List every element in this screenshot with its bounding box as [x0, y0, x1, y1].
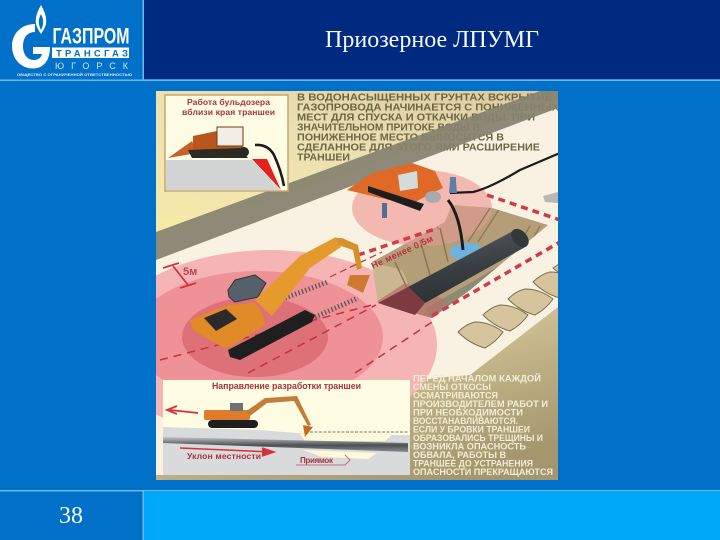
inset: bulldozer near trench edge: вблизи края траншеи: [182, 107, 275, 117]
icon: G ring: [12, 24, 50, 68]
text: top instructions: ПОНИЖЕННОЕ МЕСТО ВЫНОСИТСЯ В: [297, 132, 504, 144]
inset bulldozer: [168, 127, 249, 158]
text: safety instructions: ПРИ НЕОБХОДИМОСТИ: [413, 408, 523, 418]
icon: flame: [36, 5, 46, 34]
trench: [372, 205, 548, 318]
header bar: [0, 0, 720, 81]
text: safety instructions: ВОЗНИКЛА ОПАСНОСТЬ: [413, 442, 527, 452]
dimension: 5m: [163, 263, 197, 288]
hose: [448, 153, 560, 250]
inset: trench development direction: Уклон местности: [187, 451, 261, 461]
inset: trench development direction: Приямок: [300, 456, 334, 465]
text: top instructions: ЗНАЧИТЕЛЬНОМ ПРИТОКЕ ВОДЫ В: [297, 122, 480, 134]
text: top instructions: ГАЗОПРОВОДА НАЧИНАЕТСЯ С ПОНИЖЕННЫХ: [297, 102, 560, 114]
logo: Gazprom Transgaz Yugorsk: ОБЩЕСТВО С ОГРАНИЧЕННОЙ ОТВЕТСТВЕННОСТЬЮ: [17, 73, 132, 77]
red danger zones: [156, 170, 492, 418]
excavator body: [190, 303, 265, 347]
text: top instructions: ТРАНШЕИ: [297, 152, 350, 164]
section excavator: [204, 396, 313, 437]
picture: trench safety poster: [156, 91, 558, 480]
text: safety instructions: ОСМАТРИВАЮТСЯ: [413, 390, 498, 400]
dimension label: at least 0.5 m: Не менее 0,5м: [370, 233, 435, 271]
text: safety instructions: ЕСЛИ У БРОВКИ ТРАНШЕИ: [413, 424, 530, 434]
text: safety instructions: ОБВАЛА, РАБОТЫ В: [413, 450, 507, 460]
machine at far edge: [543, 192, 558, 203]
text: safety instructions: ТРАНШЕЕ ДО УСТРАНЕНИЯ: [413, 458, 533, 468]
page number: 38: [59, 503, 83, 529]
text: top instructions: СДЕЛАННОЕ ДЛЯ ЭТОГО ЯМИ РАСШИРЕНИЕ: [297, 142, 540, 154]
text: safety instructions: ОБРАЗОВАЛИСЬ ТРЕЩИНЫ И: [413, 433, 543, 443]
logo: Gazprom Transgaz Yugorsk: ЮГОРСК: [55, 61, 129, 71]
workers: [382, 177, 457, 218]
logo: Gazprom Transgaz Yugorsk: ТРАНСГАЗ: [56, 48, 128, 60]
text: top instructions: В ВОДОНАСЫЩЕННЫХ ГРУНТАХ ВСКРЫТИЕ: [297, 92, 553, 104]
arrow: direction left: [167, 406, 198, 414]
logo: Gazprom Transgaz Yugorsk: [12, 5, 132, 77]
text: safety instructions: СМЕНЫ ОТКОСЫ: [413, 382, 491, 392]
excavator tracks: [228, 310, 315, 360]
pipe in section: [163, 437, 408, 452]
pipe: [378, 226, 532, 315]
footer bar: [0, 490, 720, 540]
red-white barrier lines: [160, 195, 560, 373]
text: safety instructions: ВОССТАНАВЛИВАЮТСЯ.: [413, 416, 518, 426]
bulldozer in scene: [347, 163, 443, 211]
excavator: [190, 237, 370, 360]
dimension: 5m: 5м: [183, 266, 197, 278]
text: top instructions: [297, 92, 560, 164]
company name: ГАЗПРОМ: [52, 24, 130, 48]
text: safety instructions: [413, 372, 553, 477]
inset: bulldozer near trench edge: [165, 95, 288, 191]
arrow: slope: [180, 448, 274, 456]
title: Приозерное ЛПУМГ: [325, 27, 539, 53]
inset: trench development direction: Направление разработки траншеи: [212, 381, 361, 391]
text: safety instructions: ПЕРЕД НАЧАЛОМ КАЖДОЙ: [413, 372, 541, 384]
excavator boom and arm: [255, 237, 341, 316]
sand bags: [458, 264, 558, 348]
text: safety instructions: ПРОИЗВОДИТЕЛЕМ РАБОТ И: [413, 399, 548, 409]
inset: trench development direction: [163, 380, 410, 475]
excavator cab: [228, 275, 266, 302]
text: safety instructions: ОПАСНОСТИ ПРЕКРАЩАЮТСЯ: [413, 467, 553, 477]
inset: bulldozer near trench edge: Работа бульдозера: [187, 97, 270, 107]
track marks: [285, 282, 358, 317]
text: top instructions: МЕСТ ДЛЯ СПУСКА И ОТКАЧКИ ВОДЫ. ПРИ: [297, 112, 535, 124]
ground backgrounds: [156, 91, 558, 480]
road band: [156, 91, 558, 260]
